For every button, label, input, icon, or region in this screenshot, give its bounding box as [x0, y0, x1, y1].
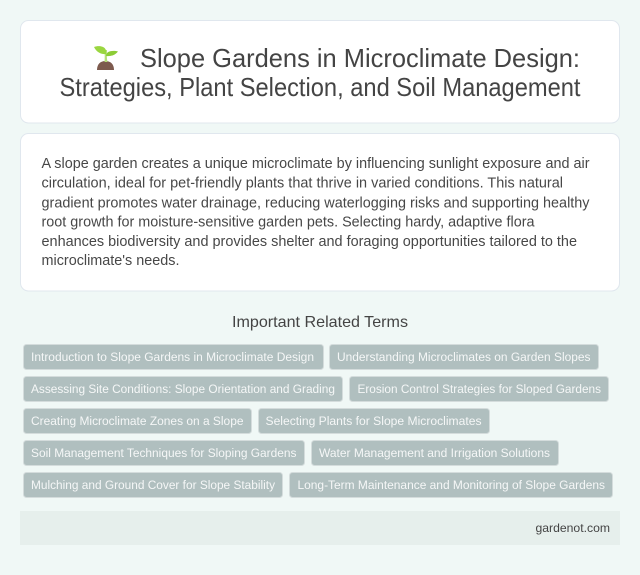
description text: gradient promotes water drainage, reducing waterlogging risks and supporting healthy [42, 196, 590, 212]
tag [24, 344, 324, 370]
tag: Water Management and Irrigation Solutions [319, 446, 550, 460]
description text: A slope garden creates a unique microclimate by influencing sunlight exposure and air [42, 156, 590, 172]
title line 2: Strategies, Plant Selection, and Soil Management [60, 74, 580, 102]
tag: Erosion Control Strategies for Sloped Gardens [358, 382, 601, 396]
panel: description [20, 134, 620, 291]
tag: Soil Management Techniques for Sloping Gardens [31, 446, 296, 460]
description text: microclimate's needs. [42, 253, 180, 269]
footer site name: gardenot.com [536, 521, 610, 535]
tag [24, 376, 342, 402]
tag list [24, 344, 612, 498]
icon: sprout [94, 46, 118, 70]
description text [42, 156, 590, 269]
footer [20, 511, 620, 545]
tag [258, 408, 490, 434]
panel: title header [20, 20, 620, 123]
tag [312, 440, 558, 466]
description text: root growth for moisture-sensitive garden pets. Selecting hardy, adaptive flora [42, 214, 535, 230]
tag [330, 344, 598, 370]
tag: Assessing Site Conditions: Slope Orientation and Grading [31, 382, 335, 396]
tag [290, 472, 612, 498]
tag: Introduction to Slope Gardens in Microclimate Design [31, 350, 314, 364]
tag [24, 440, 304, 466]
tag: Creating Microclimate Zones on a Slope [31, 414, 244, 428]
tag: Understanding Microclimates on Garden Slopes [337, 350, 590, 364]
description text: enhances biodiversity and provides shelter and foraging opportunities tailored to the [42, 234, 577, 250]
tag [24, 408, 252, 434]
tag [350, 376, 608, 402]
tag: Mulching and Ground Cover for Slope Stability [31, 478, 276, 492]
tag: Selecting Plants for Slope Microclimates [266, 414, 482, 428]
title line 1: Slope Gardens in Microclimate Design: [140, 45, 580, 73]
description text: circulation, ideal for pet-friendly plants that thrive in varied conditions. This natural [42, 176, 563, 192]
heading: important related terms: Important Related Terms [232, 314, 408, 331]
tag: Long-Term Maintenance and Monitoring of Slope Gardens [298, 478, 605, 492]
tag [24, 472, 282, 498]
